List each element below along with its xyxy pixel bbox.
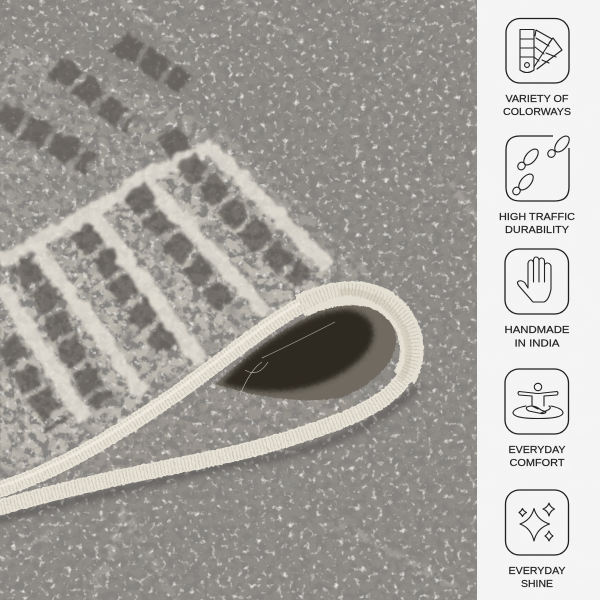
dark interior — [222, 310, 374, 392]
feature: everyday comfort — [505, 369, 568, 469]
label: VARIETY OF — [506, 93, 568, 105]
icon: hand — [505, 249, 568, 314]
icon: sparkles — [506, 490, 568, 555]
lighter flap zone — [0, 140, 340, 470]
speckle texture — [0, 0, 477, 600]
feature: everyday shine — [506, 490, 568, 590]
loose fibres — [240, 322, 335, 395]
cream stripes — [0, 145, 330, 420]
blotch texture — [0, 4, 396, 598]
rug floor surface — [0, 0, 477, 600]
label: DURABILITY — [505, 224, 569, 236]
dark blocks — [0, 40, 303, 425]
label: COLORWAYS — [503, 106, 571, 118]
label: IN INDIA — [514, 338, 560, 350]
label: HIGH TRAFFIC — [499, 211, 575, 223]
rug underside — [60, 384, 356, 483]
label: COMFORT — [510, 457, 565, 469]
feature: handmade in india — [504, 249, 570, 350]
label: HANDMADE — [504, 324, 570, 336]
floor pattern lines — [0, 0, 477, 600]
icon: meditating figure — [505, 369, 568, 434]
roll opening — [215, 303, 396, 400]
icon: colour fan — [506, 18, 569, 83]
label: EVERYDAY — [508, 565, 566, 577]
feature: high traffic durability — [499, 134, 575, 236]
feature sidebar — [477, 0, 600, 600]
binding shadow — [0, 385, 420, 520]
flap woven pattern — [0, 40, 330, 425]
rug photograph — [0, 0, 477, 600]
interior fabric — [215, 303, 396, 400]
feature: variety of colorways — [503, 18, 571, 118]
label: EVERYDAY — [508, 444, 566, 456]
label: SHINE — [521, 578, 553, 590]
icon: footprints — [506, 134, 572, 201]
cream binding edge — [0, 290, 414, 509]
sidebar background — [477, 0, 600, 600]
sidebar texture — [477, 0, 600, 600]
folded rug flap — [0, 40, 372, 485]
